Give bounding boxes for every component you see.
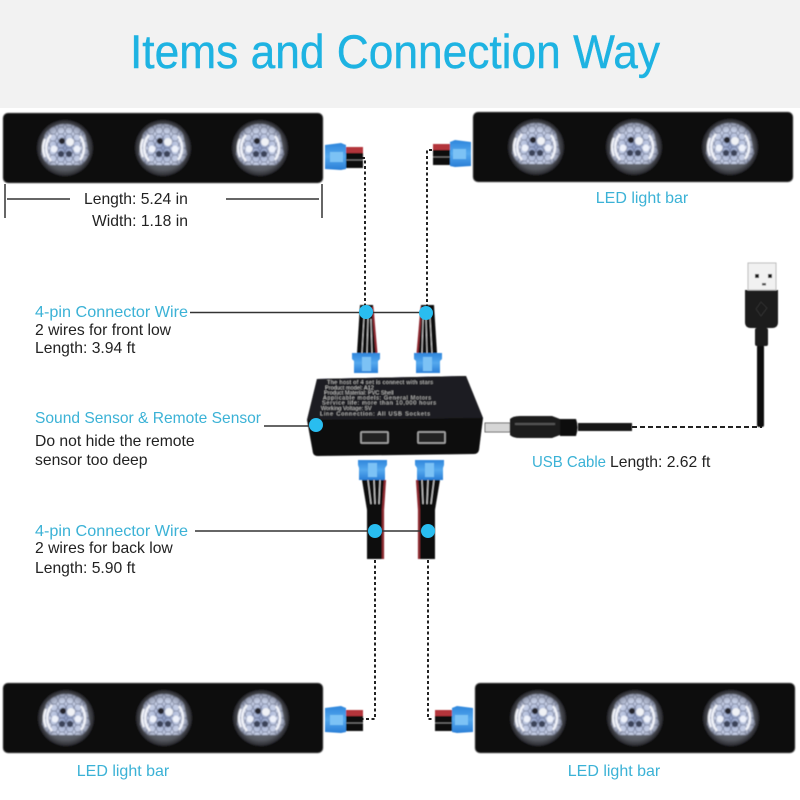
callout: upper 4-pin connector wire: 2 wires for front low (35, 322, 172, 339)
connector: bottom left (325, 706, 363, 733)
callout: upper 4-pin connector wire: 4-pin Connector Wire (35, 304, 188, 321)
callout: USB cable: USB Cable (532, 454, 606, 471)
upper wire harness right (414, 305, 442, 373)
callout: upper 4-pin connector wire: Length: 3.94 ft (35, 340, 136, 357)
LED light bar: bottom right (475, 683, 795, 753)
dimension marks (5, 184, 322, 218)
label: LED light bar bottom left: LED light bar (77, 763, 170, 780)
callout: lower 4-pin connector wire: Length: 5.90 ft (35, 560, 136, 577)
LED light bar: bottom left (3, 683, 323, 753)
box spec text: Line Connection: All USB Sockets (320, 412, 430, 418)
callout: sound and remote sensor: Do not hide the remote (35, 433, 195, 450)
callout: lower 4-pin connector wire (35, 523, 188, 577)
header band (0, 0, 800, 108)
box spec text (320, 380, 436, 418)
lower wire harness right (415, 460, 444, 559)
box spec text: Service life: more than 10,000 hours (322, 400, 436, 406)
callout: sound and remote sensor: Sound Sensor & Remote Sensor (35, 410, 262, 427)
dashed cable: USB (632, 426, 762, 428)
callout: lower 4-pin connector wire: 2 wires for back low (35, 540, 173, 557)
LED light bar: top left (3, 113, 323, 183)
connector: bottom right (435, 706, 473, 733)
upper wire harness left (352, 305, 380, 373)
connector: top right (433, 140, 471, 167)
control box (307, 376, 483, 456)
DC plug and cable (485, 416, 632, 438)
callout: lower 4-pin connector wire: 4-pin Connector Wire (35, 523, 188, 540)
box spec text: The host of 4 set is connect with stars (327, 380, 433, 386)
LED light bar: top right (473, 112, 793, 182)
connector: top left (325, 143, 363, 170)
dimension text: Width: 1.18 in (92, 213, 188, 230)
callout: sound and remote sensor (35, 410, 262, 469)
USB port right (418, 432, 445, 443)
USB plug and cable (745, 263, 778, 427)
dashed cable: bottom right (428, 560, 434, 719)
dashed cable: top left (362, 158, 365, 306)
USB port left (361, 432, 388, 443)
callout: USB cable (532, 454, 711, 471)
leader line: lower connector (195, 530, 428, 532)
title: Items and Connection Way (130, 25, 660, 78)
leader line: sensor (264, 425, 310, 427)
dimension text (84, 191, 188, 230)
label: LED light bar top right: LED light bar (596, 190, 689, 207)
dashed cable: bottom left (362, 560, 375, 719)
label: LED light bar bottom right: LED light bar (568, 763, 661, 780)
dashed cable: top right (427, 150, 432, 306)
leader line: upper connector (190, 312, 426, 314)
callout: upper 4-pin connector wire (35, 304, 188, 357)
marker dots (309, 305, 435, 538)
callout: USB cable: Length: 2.62 ft (610, 454, 711, 471)
lower wire harness left (358, 460, 387, 559)
callout: sound and remote sensor: sensor too deep (35, 452, 148, 469)
dimension text: Length: 5.24 in (84, 191, 188, 208)
box spec text: Working Voltage: 5V (321, 406, 372, 412)
box spec text: Product model: A12 (325, 386, 374, 392)
box spec text: Applicable models: General Motors (323, 396, 431, 402)
box spec text: Product Material: PVC Shell (324, 390, 393, 396)
